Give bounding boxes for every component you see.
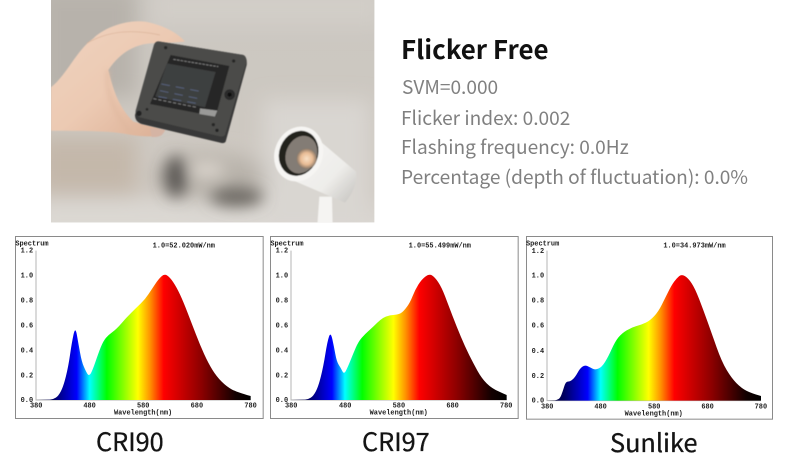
chart: CRI97 spectrum: 780 bbox=[500, 403, 512, 411]
chart: CRI97 spectrum: 0.6 bbox=[276, 322, 288, 330]
chart: Sunlike spectrum: 680 bbox=[701, 403, 714, 411]
chart: Sunlike spectrum: Wavelength(nm) bbox=[625, 411, 683, 419]
hand bbox=[51, 21, 185, 137]
text: flicker index: Flicker index: 0.002 bbox=[401, 103, 570, 131]
chart: Sunlike spectrum: 0.6 bbox=[532, 323, 544, 331]
text: SVM value: SVM=0.000 bbox=[402, 72, 498, 100]
chart: CRI97 spectrum: 0.8 bbox=[276, 297, 288, 305]
chart: CRI90 spectrum: 0.8 bbox=[21, 297, 33, 305]
chart: Sunlike spectrum: 1.0 bbox=[532, 273, 544, 281]
chart: Sunlike spectrum: Spectrum bbox=[526, 240, 559, 248]
chart: Sunlike spectrum: 1.2 bbox=[532, 248, 544, 256]
chart: CRI90 spectrum: 480 bbox=[83, 403, 96, 411]
spotlight bbox=[274, 126, 354, 222]
caption: CRI97: CRI97 bbox=[362, 423, 430, 459]
chart: CRI97 spectrum: Wavelength(nm) bbox=[370, 410, 428, 418]
chart: CRI97 spectrum: 1.2 bbox=[276, 248, 288, 256]
chart: Sunlike spectrum: 780 bbox=[755, 403, 767, 411]
chart: CRI97 spectrum: Spectrum bbox=[270, 240, 304, 248]
caption: Sunlike: Sunlike bbox=[610, 424, 697, 460]
photo: hand holding flicker meter beside spotlight bbox=[51, 0, 374, 222]
chart: CRI90 spectrum: 380 bbox=[30, 403, 42, 411]
chart: Sunlike spectrum: 0.0 bbox=[532, 398, 544, 406]
caption: CRI90: CRI90 bbox=[96, 423, 164, 459]
spectrum curve bbox=[291, 275, 507, 400]
chart: CRI97 spectrum: 0.4 bbox=[276, 347, 288, 355]
heading: Flicker Free: Flicker Free bbox=[401, 30, 549, 67]
chart: CRI90 spectrum bbox=[15, 236, 264, 419]
chart: CRI97 spectrum: 1.0=55.499mW/nm bbox=[409, 242, 471, 250]
chart: CRI97 spectrum: 680 bbox=[446, 403, 459, 411]
text: flashing frequency: Flashing frequency: 0.0Hz bbox=[401, 132, 629, 160]
chart: CRI97 spectrum: 480 bbox=[339, 403, 351, 411]
chart: CRI90 spectrum: 580 bbox=[137, 403, 149, 411]
chart: CRI90 spectrum: 0.4 bbox=[21, 347, 33, 355]
chart: CRI90 spectrum: Wavelength(nm) bbox=[114, 410, 172, 418]
chart: CRI97 spectrum: 580 bbox=[393, 403, 405, 411]
chart: CRI97 spectrum: 0.0 bbox=[276, 397, 288, 405]
chart: CRI90 spectrum: 1.2 bbox=[21, 248, 33, 256]
chart: CRI90 spectrum: 0.6 bbox=[21, 322, 33, 330]
chart: Sunlike spectrum: 0.4 bbox=[532, 348, 544, 356]
chart: CRI97 spectrum: 1.0 bbox=[276, 272, 288, 280]
chart: CRI97 spectrum: 380 bbox=[285, 403, 297, 411]
spectrum curve bbox=[36, 275, 251, 400]
chart: CRI97 spectrum: 0.2 bbox=[276, 372, 288, 380]
spectrum curve bbox=[547, 275, 761, 401]
chart: CRI90 spectrum: Spectrum bbox=[15, 240, 49, 248]
chart: CRI90 spectrum: 680 bbox=[191, 403, 203, 411]
chart: Sunlike spectrum: 580 bbox=[648, 403, 660, 411]
chart: CRI90 spectrum: 1.0 bbox=[21, 272, 33, 280]
text: percentage depth of fluctuation: Percentage (depth of fluctuation): 0.0% bbox=[401, 162, 748, 190]
chart: Sunlike spectrum: 0.8 bbox=[532, 298, 544, 306]
chart: Sunlike spectrum: 1.0=34.973mW/nm bbox=[663, 243, 726, 251]
chart: CRI90 spectrum: 780 bbox=[244, 403, 257, 411]
chart: CRI90 spectrum: 1.0=52.020mW/nm bbox=[153, 242, 215, 250]
chart: CRI90 spectrum: 0.0 bbox=[21, 397, 33, 405]
chart: Sunlike spectrum: 380 bbox=[541, 403, 553, 411]
chart: CRI90 spectrum: 0.2 bbox=[21, 372, 33, 380]
chart: Sunlike spectrum: 0.2 bbox=[532, 373, 544, 381]
device bbox=[135, 41, 247, 143]
chart: Sunlike spectrum bbox=[526, 236, 773, 420]
chart: Sunlike spectrum: 480 bbox=[594, 403, 607, 411]
chart: CRI97 spectrum bbox=[270, 236, 519, 419]
